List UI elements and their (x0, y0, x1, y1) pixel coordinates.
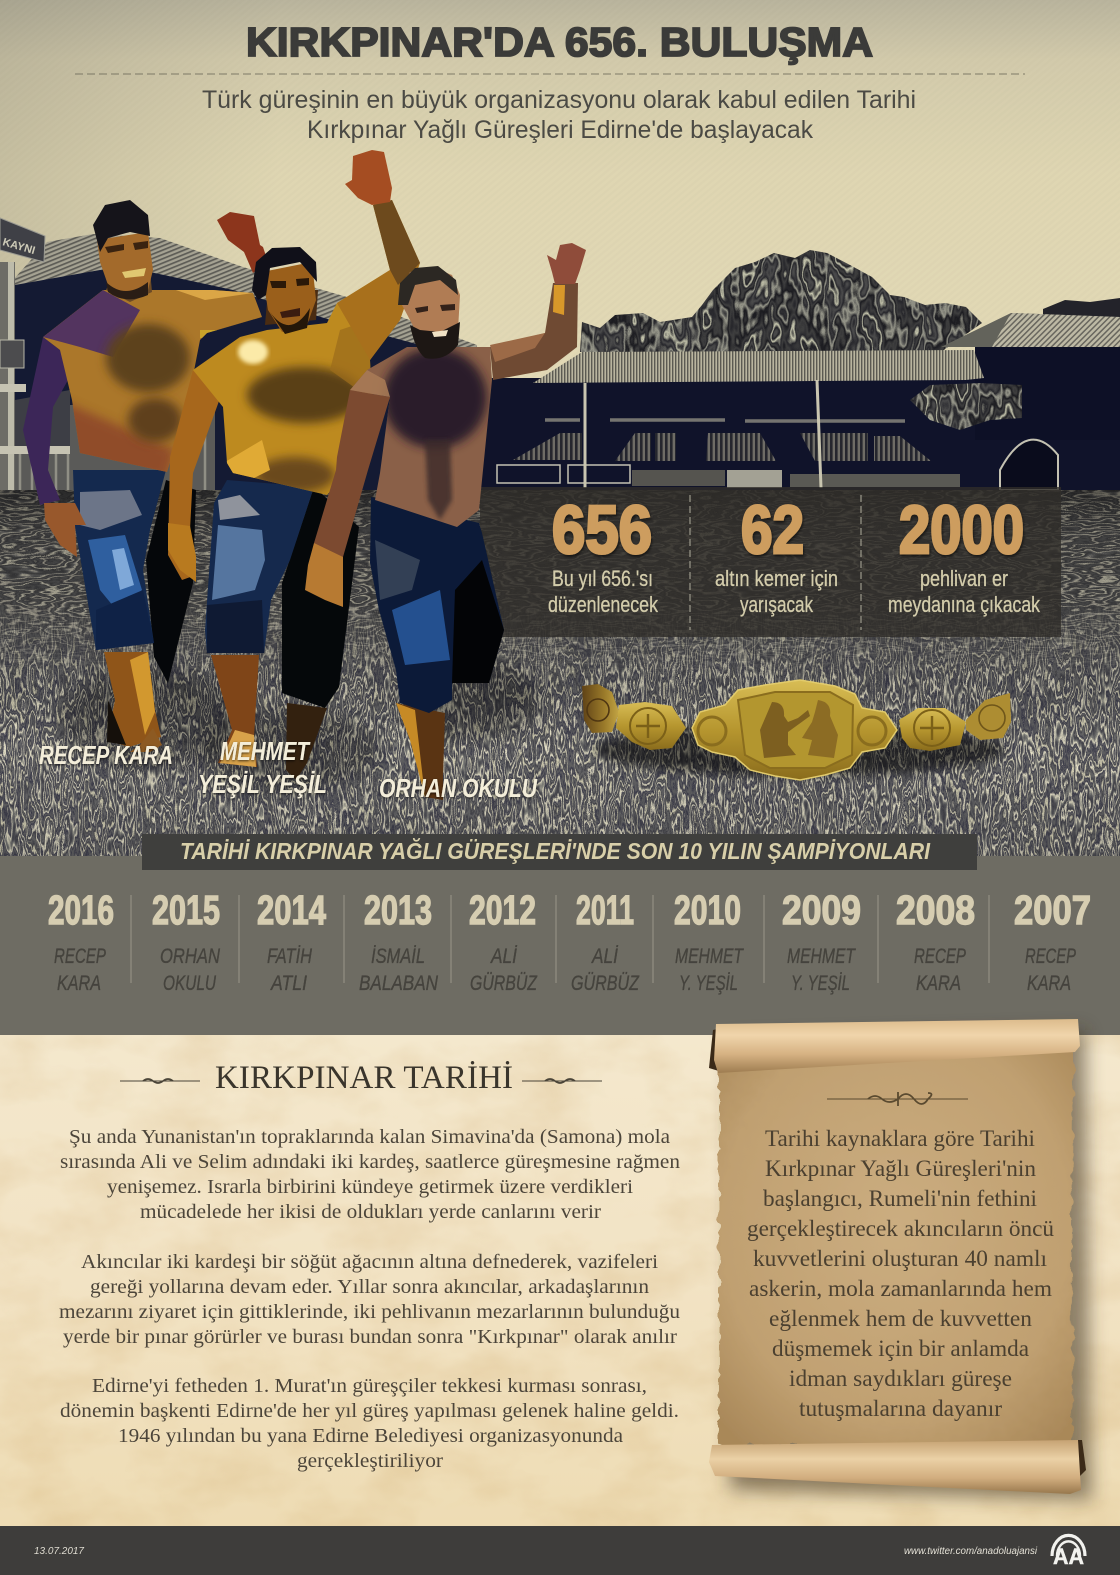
stat captions (548, 566, 1041, 617)
champion names: Y. YEŞİL (791, 972, 850, 995)
champion years: 2008 (896, 887, 975, 933)
history text: mücadelede her ikisi de oldukları yerde canlarını verir (140, 1201, 601, 1223)
title: KIRKPINAR'DA 656. BULUŞMA (246, 19, 873, 65)
band: champions background (0, 856, 1120, 1035)
stat numbers: 656 (552, 492, 652, 568)
parchment scroll (709, 1019, 1092, 1500)
champion names: Y. YEŞİL (679, 972, 738, 995)
champion names: İSMAİL (371, 945, 425, 968)
background trees (570, 245, 1120, 355)
grandstand (470, 313, 1120, 490)
scroll text: düşmemek için bir anlamda (772, 1336, 1029, 1361)
stat captions: Bu yıl 656.'sı (552, 566, 653, 591)
scroll text (747, 1126, 1055, 1421)
sky background (0, 0, 1120, 500)
scroll text: başlangıcı, Rumeli'nin fethini (763, 1186, 1037, 1211)
stat numbers (552, 492, 1024, 568)
history text: Şu anda Yunanistan'ın topraklarında kalan Simavina'da (Samona) mola (69, 1126, 670, 1148)
scroll text: askerin, mola zamanlarında hem (749, 1276, 1052, 1301)
champion years: 2010 (674, 887, 741, 933)
ornament: scroll flourish (827, 1092, 968, 1106)
history text: sırasında Ali ve Selim adındaki iki kardeş, saatlerce güreşmesine rağmen (60, 1151, 680, 1173)
footer (0, 1526, 1120, 1575)
champion names: ORHAN (160, 945, 221, 968)
champion names: GÜRBÜZ (470, 972, 538, 995)
stat captions: meydanına çıkacak (888, 592, 1041, 617)
wrestler: Orhan Okulu (305, 243, 586, 800)
champion years: 2016 (48, 887, 114, 933)
icon: AA logo: AA (1053, 1544, 1084, 1569)
heading bar: champions (142, 834, 977, 870)
heading bar: champions: TARİHİ KIRKPINAR YAĞLI GÜREŞLERİ'NDE SON 10 YILIN ŞAMPİYONLARI (180, 837, 931, 864)
history text: 1946 yılından bu yana Edirne Belediyesi organizasyonunda (118, 1425, 623, 1447)
champion names: MEHMET (675, 945, 745, 968)
champion names: ALİ (489, 945, 518, 968)
history text: dönemin başkenti Edirne'de her yıl güreş yapılması gelenek haline geldi. (60, 1400, 679, 1422)
stat numbers: 62 (741, 492, 804, 568)
ornament left (120, 1079, 200, 1083)
stat captions: pehlivan er (920, 566, 1008, 591)
scroll text: tutuşmalarına dayanır (799, 1396, 1002, 1421)
champion names: KARA (916, 972, 961, 995)
champion years: 2014 (257, 887, 326, 933)
wrestler name labels: MEHMET (220, 736, 311, 766)
scroll text: Kırkpınar Yağlı Güreşleri'nin (765, 1156, 1036, 1181)
champions column dividers (131, 895, 989, 983)
history text: yenişemez. Israrla birbirini kündeye getirmek üzere verdikleri (107, 1176, 633, 1198)
stat captions: yarışacak (740, 592, 814, 617)
champion years: 2009 (782, 887, 861, 933)
dashed rule under title (75, 73, 1025, 75)
champion names: RECEP (54, 945, 106, 968)
grass field (0, 490, 1120, 860)
champion years (48, 887, 1091, 933)
history text (59, 1126, 680, 1472)
champion years: 2012 (469, 887, 536, 933)
twitter url: www.twitter.com/anadoluajansi (904, 1546, 1038, 1557)
stat captions: altın kemer için (715, 566, 838, 591)
champion names: KARA (57, 972, 101, 995)
subtitle: Türk güreşinin en büyük organizasyonu olarak kabul edilen Tarihi (202, 86, 916, 114)
panel: parchment background (0, 1035, 1120, 1526)
stat numbers: 2000 (899, 492, 1024, 568)
champion names: MEHMET (787, 945, 857, 968)
scroll text: idman saydıkları güreşe (789, 1366, 1012, 1391)
left building: KAYNI (1, 236, 36, 257)
history text: Edirne'yi fetheden 1. Murat'ın güreşçiler tekkesi kurması sonrası, (92, 1375, 647, 1397)
champion names: GÜRBÜZ (571, 972, 640, 995)
subtitle (202, 86, 916, 144)
panel: statistics (480, 487, 1061, 637)
history text: Akıncılar iki kardeşi bir söğüt ağacının altına defnederek, vazifeleri (81, 1251, 658, 1273)
champion years: 2011 (576, 887, 634, 933)
scroll text: gerçekleştirecek akıncıların öncü (747, 1216, 1055, 1241)
wrestler name labels (39, 736, 538, 803)
wrestler: Recep Kara (23, 200, 262, 752)
champion names: OKULU (163, 972, 217, 995)
champion names: ALİ (590, 945, 619, 968)
wrestler: Mehmet Yeşil Yeşil (168, 150, 420, 780)
champion names: KARA (1027, 972, 1071, 995)
history text: gerçekleştiriliyor (297, 1450, 443, 1472)
champion names: FATİH (267, 945, 313, 968)
left building (0, 218, 477, 492)
champion years: 2007 (1014, 887, 1091, 933)
illustration: three wrestlers (23, 150, 586, 803)
wrestler name labels: YEŞİL YEŞİL (198, 769, 327, 799)
champion years: 2015 (152, 887, 220, 933)
scroll text: Tarihi kaynaklara göre Tarihi (765, 1126, 1035, 1151)
stat captions: düzenlenecek (548, 592, 659, 617)
history text: gereği yollarına devam eder. Yıllar sonra akıncılar, arkadaşlarının (90, 1276, 649, 1298)
champion names (54, 945, 1076, 995)
date: 13.07.2017 (34, 1546, 84, 1557)
history text: mezarını ziyaret için gittiklerinde, iki pehlivanın mezarlarının bulunduğu (59, 1301, 680, 1323)
wrestler name labels: RECEP KARA (39, 740, 173, 770)
champion years: 2013 (364, 887, 432, 933)
champion names: RECEP (914, 945, 966, 968)
ornament right (522, 1079, 602, 1083)
icon: golden belt (582, 680, 1011, 780)
scroll text: eğlenmek hem de kuvvetten (769, 1306, 1032, 1331)
heading: Kırkpınar Tarihi: KIRKPINAR TARİHİ (215, 1060, 513, 1096)
champion names: ATLI (269, 972, 307, 995)
champion names: BALABAN (359, 972, 439, 995)
wrestler name labels: ORHAN OKULU (379, 773, 538, 803)
scroll text: kuvvetlerini oluşturan 40 namlı (753, 1246, 1047, 1271)
history text: yerde bir pınar görürler ve burası bundan sonra "Kırkpınar" olarak anılır (63, 1326, 677, 1348)
champion names: RECEP (1025, 945, 1076, 968)
subtitle: Kırkpınar Yağlı Güreşleri Edirne'de başlayacak (307, 116, 813, 144)
